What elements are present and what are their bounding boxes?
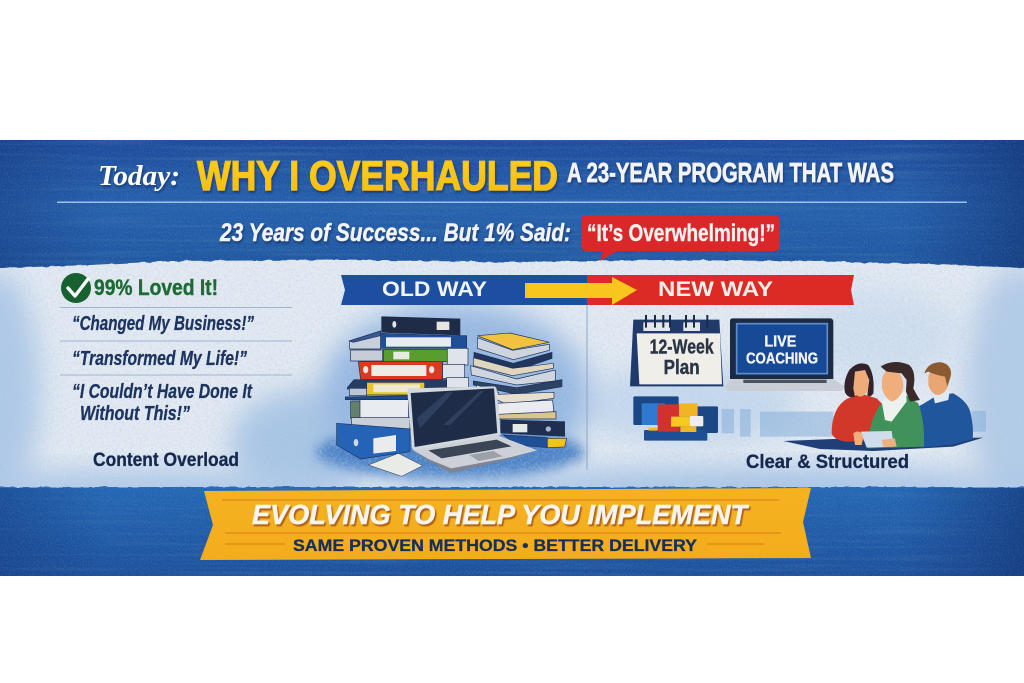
icon: 12-week plan calendar: Plan (664, 357, 700, 379)
header divider (57, 202, 967, 203)
banner ribbon (200, 488, 811, 560)
quote: transformed my life: “Transformed My Life!” (72, 348, 247, 370)
quote: couldn't have done it (72, 381, 253, 425)
streak texture (0, 140, 1024, 576)
title: a 23-year program that was: A 23-YEAR PROGRAM THAT WAS (567, 157, 894, 188)
quote: changed my business: “Changed My Business!” (72, 313, 254, 335)
team of three people (832, 362, 973, 448)
icon: live coaching laptop (725, 318, 845, 391)
new way ribbon (587, 275, 854, 305)
heading: 99% loved it: 99% Loved It! (94, 275, 218, 300)
illustration: calendar, coaching laptop, team (630, 315, 986, 451)
new way ribbon: NEW WAY (658, 278, 773, 301)
quote: couldn't have done it: “I Couldn’t Have Done It (72, 381, 253, 403)
laptop (407, 386, 537, 473)
caption: clear and structured: Clear & Structured (746, 452, 909, 473)
faded background bars (722, 409, 986, 437)
icon: colourful stacked blocks (633, 396, 718, 441)
bottom blue footer band (0, 480, 1024, 576)
icon: 12-week plan calendar: 12-Week (650, 337, 714, 359)
column divider (586, 305, 588, 470)
person: centre, green cardigan (853, 362, 924, 448)
icon: live coaching laptop: COACHING (746, 351, 818, 368)
footer banner (200, 488, 811, 560)
banner subhead: SAME PROVEN METHODS • BETTER DELIVERY (293, 536, 698, 555)
old way ribbon (341, 275, 588, 305)
person: right, blue sweater (918, 362, 973, 448)
top blue header band (0, 140, 1024, 275)
quote: couldn't have done it: Without This!” (80, 403, 190, 425)
book stack (471, 333, 567, 448)
quote dividers (60, 308, 292, 375)
light textured centre panel (0, 259, 1024, 488)
illustration: stacks of binders, books and laptop (337, 317, 567, 476)
icon: green check (61, 273, 91, 303)
banner rules (222, 500, 781, 544)
paper grain texture (0, 140, 1024, 576)
title: Why I Overhauled: WHY I OVERHAULED (197, 152, 558, 199)
infographic canvas (0, 140, 1024, 576)
person: left, red sweater (832, 363, 883, 442)
icon: 12-week plan calendar (630, 315, 723, 386)
arrow: old to new (525, 277, 637, 305)
binder stack (337, 317, 469, 459)
subtitle: 23 Years of Success... But 1% Said: (219, 219, 571, 247)
panel: old way vs new way banner (341, 275, 854, 305)
callout: It's Overwhelming (581, 215, 780, 261)
title: Today: Today: (98, 160, 180, 192)
old way ribbon: OLD WAY (382, 278, 487, 301)
loose open papers (368, 453, 423, 476)
side vignette on blue bands (0, 140, 1024, 576)
icon: live coaching laptop: LIVE (764, 333, 796, 350)
banner headline: EVOLVING TO HELP YOU IMPLEMENT (252, 499, 750, 530)
caption: content overload: Content Overload (93, 450, 239, 471)
panel: what people said (60, 273, 292, 471)
callout: It's Overwhelming: “It’s Overwhelming!” (587, 220, 775, 247)
title row (98, 152, 894, 199)
ground shadow (783, 438, 983, 451)
